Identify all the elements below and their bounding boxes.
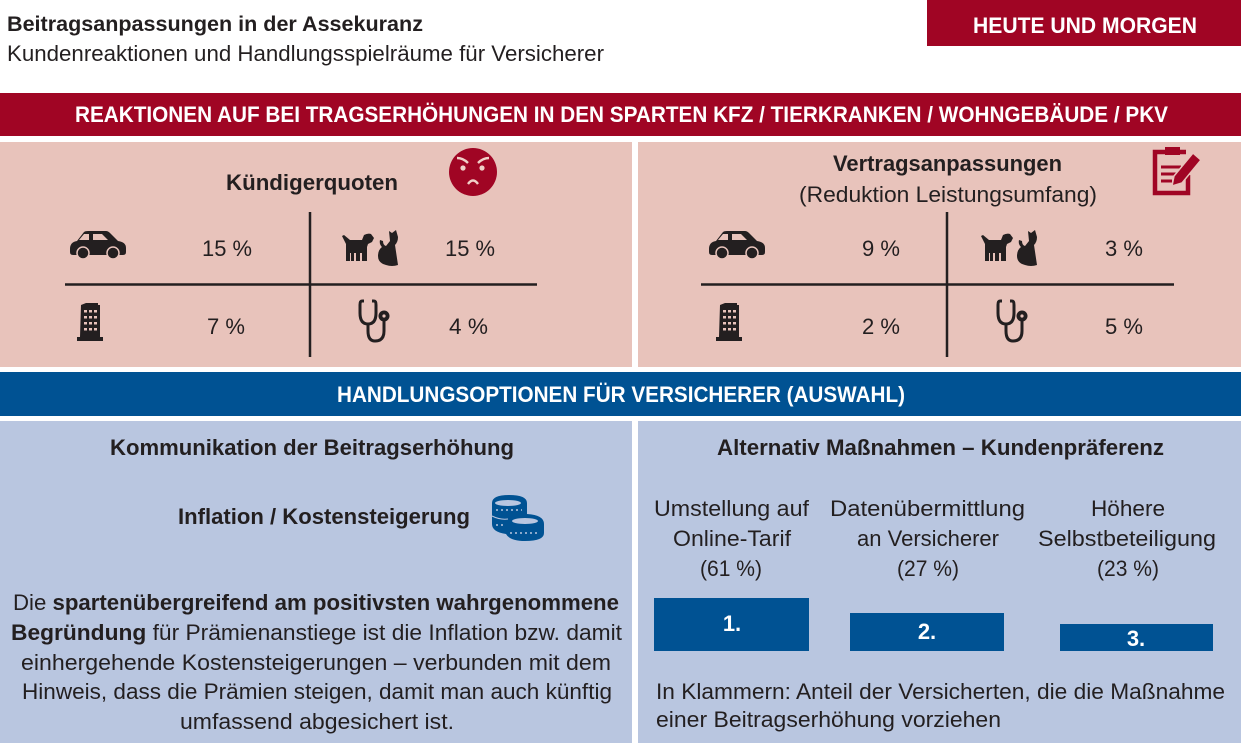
label: rank 1 (654, 496, 810, 581)
label: rank 3: Höhere (1091, 496, 1165, 521)
body text: Hinweis, dass die Prämien steigen, damit man auch künftig (22, 679, 612, 704)
panel: Alternativ Maßnahmen (638, 421, 1241, 743)
heading: Kommunikation: Kommunikation der Beitragserhöhung (110, 435, 514, 460)
label: rank 2: Datenübermittlung (830, 496, 1025, 521)
table grid (701, 212, 1174, 357)
heading: Vertragsanpassungen (799, 151, 1097, 207)
section header: options (0, 372, 1241, 416)
label: rank 2 (830, 496, 1025, 581)
bar 2 (850, 613, 1004, 651)
icon: stethoscope (360, 301, 390, 341)
bar 1: 1. (723, 611, 741, 636)
icon: stethoscope (998, 301, 1028, 341)
badge: heute und morgen (927, 0, 1241, 46)
value: building: 2 % (862, 314, 900, 339)
icon: angry face (449, 148, 497, 196)
subheading: Inflation: Inflation / Kostensteigerung (178, 504, 470, 529)
body text: Die spartenübergreifend am positivsten wahrgenommene (13, 590, 619, 615)
title: Beitragsanpassungen in der Assekuranz (7, 13, 423, 36)
section header: options: HANDLUNGSOPTIONEN FÜR VERSICHERER (AUSWAHL) (337, 382, 905, 407)
body text: umfassend abgesichert ist. (180, 709, 454, 734)
value: car: 15 % (202, 236, 252, 261)
body text: Begründung für Prämienanstiege ist die Inflation bzw. damit (11, 620, 622, 645)
value: stethoscope: 4 % (449, 314, 488, 339)
panel: Kommunikation (0, 421, 632, 743)
section header: reactions: REAKTIONEN AUF BEI TRAGSERHÖHUNGEN IN DEN SPARTEN KFZ / TIERKRANKEN / WOHNGEBÄUDE / PKV (75, 102, 1168, 127)
label: rank 2: (27 %) (897, 556, 959, 581)
icon: coins (492, 495, 544, 541)
section header: reactions (0, 93, 1241, 136)
title: Kundenreaktionen und Handlungsspielräume für Versicherer (7, 41, 604, 66)
bar 3: 3. (1127, 626, 1145, 651)
value: car: 9 % (862, 236, 900, 261)
value: pets: 3 % (1105, 236, 1143, 261)
badge: heute und morgen: HEUTE UND MORGEN (973, 13, 1197, 38)
footnote: In Klammern: Anteil der Versicherten, die die Maßnahme (656, 679, 1225, 704)
bar chart: ranking (654, 598, 1213, 651)
footnote: einer Beitragserhöhung vorziehen (656, 707, 1001, 732)
body text (11, 590, 622, 734)
title (7, 13, 604, 66)
icon: car (709, 231, 765, 259)
heading: Alternativ Maßnahmen: Alternativ Maßnahmen – Kundenpräferenz (717, 435, 1164, 460)
icon: clipboard and pen (1155, 147, 1201, 193)
label: rank 1: Umstellung auf (654, 496, 810, 521)
label: rank 2: an Versicherer (857, 526, 999, 551)
bar 3 (1060, 624, 1213, 651)
bar 1 (654, 598, 809, 651)
bar 2: 2. (918, 619, 936, 644)
label: rank 1: Online-Tarif (673, 526, 792, 551)
icon: building (716, 303, 742, 341)
value: stethoscope: 5 % (1105, 314, 1143, 339)
panel: Kündigerquoten (0, 142, 632, 367)
value: building: 7 % (207, 314, 245, 339)
table grid (65, 212, 537, 357)
label: rank 3 (1038, 496, 1216, 581)
heading: Vertragsanpassungen: (Reduktion Leistungsumfang) (799, 182, 1097, 207)
icon: pets (981, 230, 1037, 266)
icon: pets (342, 230, 398, 266)
icon: building (77, 303, 103, 341)
value: pets: 15 % (445, 236, 495, 261)
footnote (656, 679, 1225, 732)
label: rank 3: Selbstbeteiligung (1038, 526, 1216, 551)
panel: Vertragsanpassungen (638, 142, 1241, 367)
heading: Vertragsanpassungen: Vertragsanpassungen (833, 151, 1062, 176)
label: rank 3: (23 %) (1097, 556, 1159, 581)
heading: Kündigerquoten: Kündigerquoten (226, 170, 398, 195)
label: rank 1: (61 %) (700, 556, 762, 581)
body text: einhergehende Kostensteigerungen – verbunden mit dem (21, 650, 611, 675)
icon: car (70, 231, 126, 259)
